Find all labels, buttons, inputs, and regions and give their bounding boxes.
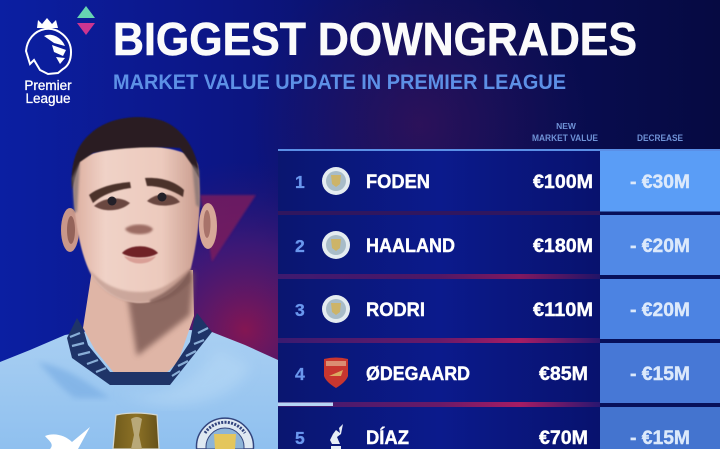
side fade — [72, 162, 200, 212]
row 2: Haaland: €180M — [533, 235, 593, 257]
table headers: DECREASE — [637, 133, 683, 143]
neck — [83, 270, 194, 374]
row 4: Odegaard: - €15M — [630, 363, 690, 385]
row 4: Odegaard: ØDEGAARD — [366, 363, 470, 385]
Manchester City crest — [196, 418, 254, 449]
eyebrows — [89, 182, 131, 203]
shirt — [0, 330, 278, 449]
row 5: Diaz: €70M — [539, 427, 588, 449]
row 3: Rodri — [278, 279, 720, 339]
hair — [72, 117, 199, 190]
row 4: Odegaard: €85M — [539, 363, 588, 385]
row 4: Odegaard — [278, 343, 720, 403]
row 5: Diaz: - €15M — [630, 427, 690, 449]
row 2: Haaland: HAALAND — [366, 235, 455, 257]
row 1: Foden: FODEN — [366, 171, 430, 193]
subtitle: MARKET VALUE UPDATE IN PREMIER LEAGUE — [113, 70, 566, 94]
row 5: Diaz: DÍAZ — [366, 426, 409, 449]
club crest — [322, 167, 350, 195]
club crest — [330, 424, 343, 449]
collar — [67, 313, 212, 385]
mouth — [122, 246, 158, 258]
row 3: Rodri: - €20M — [630, 299, 690, 321]
nose — [125, 224, 153, 234]
row separators — [278, 211, 720, 407]
row 1: Foden — [278, 151, 720, 212]
ears — [61, 208, 79, 252]
table headers: NEW — [556, 121, 577, 131]
row 2: Haaland: 2 — [295, 236, 305, 256]
table top rule — [278, 149, 720, 152]
shirt sponsor logo — [45, 427, 90, 449]
club crest — [322, 295, 350, 323]
row 4: Odegaard: 4 — [295, 364, 305, 384]
table headers — [532, 121, 683, 143]
club crest — [322, 231, 350, 259]
row 3: Rodri: €110M — [533, 299, 593, 321]
icon: Premier League lion logo — [24, 18, 72, 106]
player illustration — [0, 117, 278, 449]
row 3: Rodri: 3 — [295, 300, 305, 320]
row 5: Diaz — [278, 407, 720, 449]
table headers: MARKET VALUE — [532, 133, 598, 143]
row 1: Foden: - €30M — [630, 171, 690, 193]
icon: up and down triangles — [77, 6, 95, 35]
row 1: Foden: €100M — [533, 171, 593, 193]
row 1: Foden: 1 — [295, 172, 305, 192]
icon: Premier League lion logo: League — [25, 91, 71, 106]
eyes — [94, 198, 130, 210]
club crest — [324, 358, 348, 388]
title: BIGGEST DOWNGRADES — [113, 13, 637, 65]
row 3: Rodri: RODRI — [366, 299, 425, 321]
row 2: Haaland: - €20M — [630, 235, 690, 257]
logo wordmark: Premier — [24, 78, 72, 93]
row 5: Diaz: 5 — [295, 428, 305, 448]
face — [73, 146, 200, 303]
decorative red triangle — [200, 195, 256, 262]
gold badge — [113, 413, 159, 449]
row 2: Haaland — [278, 215, 720, 275]
